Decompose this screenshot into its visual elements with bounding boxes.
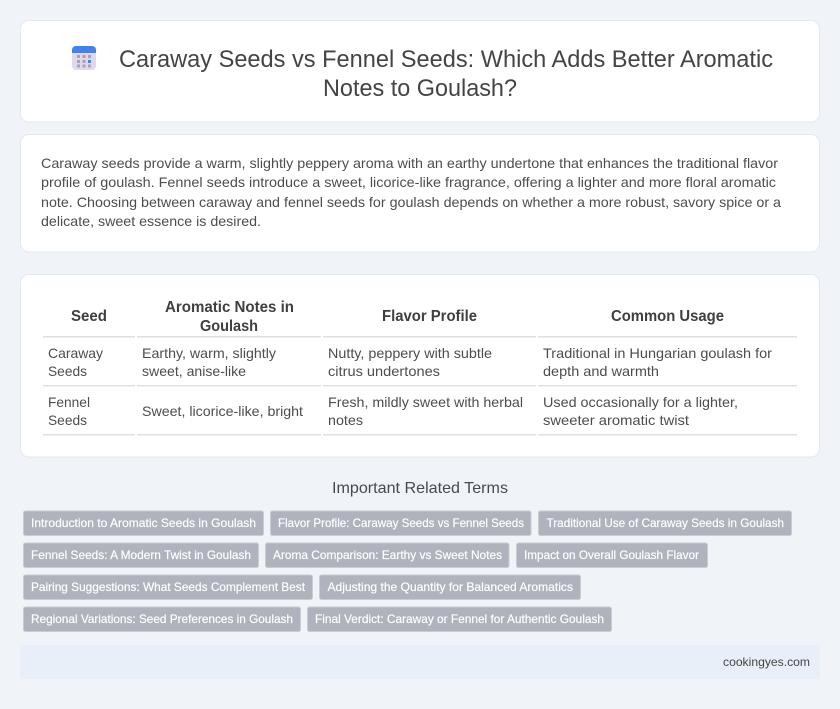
table header: Common Usage [611,308,724,325]
text block: description: note. Choosing between caraway and fennel seeds for goulash depends on whether a more robust, savory spice or a [41,194,781,210]
tag [24,607,300,632]
text block: description: profile of goulash. Fennel seeds introduce a sweet, licorice-like fragrance, offering a lighter and more floral aromatic [41,174,776,190]
panel: header [20,20,820,122]
tag: Adjusting the Quantity for Balanced Aromatics [328,580,573,594]
tag: Fennel Seeds: A Modern Twist in Goulash [31,548,251,562]
title: Caraway Seeds vs Fennel Seeds: Which Adds Better Aromatic [119,46,773,73]
table row: fennel seeds: Used occasionally for a lighter, [543,394,738,410]
panel: comparison table [20,274,820,457]
table header [71,299,724,335]
panel: related term tags [24,511,792,632]
text block: description: Caraway seeds provide a warm, slightly peppery aroma with an earthy undertone that enhances the traditional flavor [41,155,778,171]
text block: description: delicate, sweet essence is desired. [41,213,261,229]
tag: Regional Variations: Seed Preferences in Goulash [31,612,293,626]
tag [538,511,792,536]
table row: fennel seeds: Seeds [48,412,87,428]
table row: caraway seeds: Seeds [48,363,87,379]
table header: Goulash [200,318,258,335]
text block: description [41,155,781,229]
tag [270,511,531,536]
table row: fennel seeds: Fennel [48,394,90,410]
footer [20,645,820,679]
tag [24,575,312,600]
tag: Introduction to Aromatic Seeds in Goulash [31,516,256,530]
title: Notes to Goulash? [323,75,517,102]
table row: fennel seeds: sweeter aromatic twist [543,412,689,428]
title [119,46,773,102]
table header: Aromatic Notes in [165,299,294,316]
tag [516,543,708,568]
tag [266,543,509,568]
tag [24,511,264,536]
table header: Flavor Profile [382,308,477,325]
table row: caraway seeds: sweet, anise-like [142,363,246,379]
table row: fennel seeds: Sweet, licorice-like, bright [142,403,303,419]
panel: description [20,134,820,252]
table row: caraway seeds: Nutty, peppery with subtle [328,345,492,361]
table row: fennel seeds: Fresh, mildly sweet with herbal [328,394,523,410]
tag [320,575,580,600]
table row: caraway seeds: Earthy, warm, slightly [142,345,276,361]
table row: fennel seeds: notes [328,412,363,428]
table row: caraway seeds: depth and warmth [543,363,659,379]
tag [24,543,258,568]
table header: Seed [71,308,107,325]
tag: Final Verdict: Caraway or Fennel for Authentic Goulash [315,612,604,626]
icon: calendar [72,46,96,70]
tag: Flavor Profile: Caraway Seeds vs Fennel Seeds [278,516,524,530]
tag: Pairing Suggestions: What Seeds Complement Best [31,580,306,594]
tag: Impact on Overall Goulash Flavor [524,548,699,562]
table row: caraway seeds [48,345,772,379]
table row: caraway seeds: citrus undertones [328,363,440,379]
table row: caraway seeds: Traditional in Hungarian goulash for [543,345,772,361]
footer source text: cookingyes.com [723,655,810,669]
table row: caraway seeds: Caraway [48,345,103,361]
tag [308,607,612,632]
tag: Aroma Comparison: Earthy vs Sweet Notes [273,548,502,562]
table row: fennel seeds [48,394,738,428]
tag: Traditional Use of Caraway Seeds in Goulash [546,516,784,530]
heading: related terms: Important Related Terms [332,480,508,497]
